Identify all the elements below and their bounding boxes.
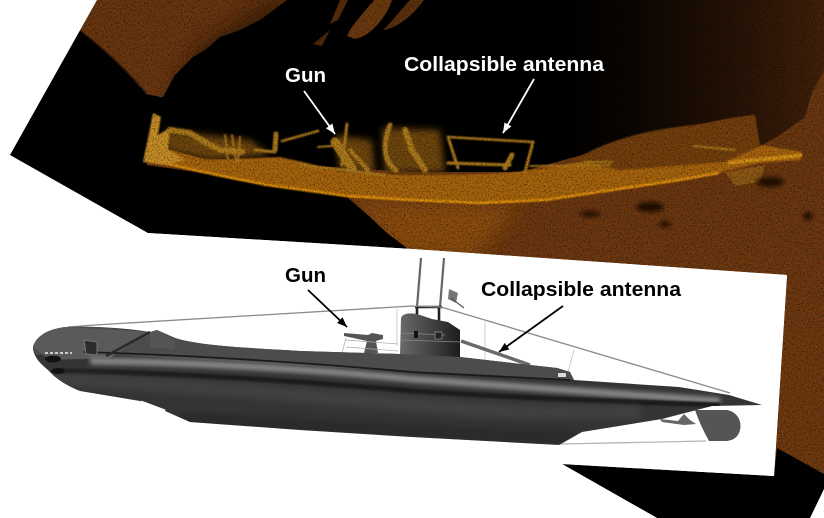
arrow: gun, sonar xyxy=(304,91,335,134)
faint seabed ridge xyxy=(82,32,146,93)
hull keel bright edge xyxy=(148,160,719,203)
label: gun, sonar: Gun xyxy=(285,64,326,87)
bridge rail xyxy=(415,307,442,322)
panel: illustration background xyxy=(148,233,787,518)
bow top xyxy=(33,327,150,360)
hull xyxy=(33,326,762,445)
mottled debris field xyxy=(165,128,445,172)
deck gun xyxy=(342,333,398,353)
stern fin block xyxy=(725,165,765,186)
bow debris xyxy=(143,113,185,165)
label: collapsible antenna, sonar xyxy=(404,53,605,133)
masts xyxy=(417,258,444,307)
dark pits in seabed xyxy=(580,177,813,227)
tube dark line xyxy=(60,371,720,405)
label: collapsible antenna, illustration xyxy=(481,278,682,352)
wreck hull body xyxy=(145,145,802,203)
stern hatch xyxy=(558,373,566,377)
flag xyxy=(448,289,464,308)
lower hull shading xyxy=(40,378,640,413)
collapsible antenna xyxy=(461,341,530,365)
black area left and below wreck xyxy=(0,30,412,252)
bright seabed near hull xyxy=(356,199,516,254)
dimming near shadow edge xyxy=(169,0,286,85)
arrow: gun, illustration xyxy=(308,290,347,327)
label: gun, illustration: Gun xyxy=(285,264,326,287)
label: collapsible antenna, illustration: Collapsible antenna xyxy=(481,278,682,301)
casing dark line xyxy=(84,352,570,380)
label: collapsible antenna, sonar: Collapsible antenna xyxy=(404,53,605,76)
wreck deck debris xyxy=(170,124,735,175)
hull base xyxy=(33,326,762,445)
arrow: antenna, sonar xyxy=(503,79,534,133)
tube band highlight xyxy=(90,361,720,401)
acoustic shadow above wreck xyxy=(150,0,824,172)
upper casing xyxy=(33,326,574,380)
submarine illustration xyxy=(30,258,770,450)
keel shading xyxy=(180,418,575,438)
bow details xyxy=(45,330,175,411)
label: gun, sonar xyxy=(285,64,335,134)
arrow: antenna, illustration xyxy=(499,306,563,352)
right mound xyxy=(575,115,760,170)
stern fin bright edge xyxy=(728,155,802,163)
wire rigging xyxy=(68,306,730,444)
label: gun, illustration xyxy=(285,264,347,327)
propeller xyxy=(660,414,696,425)
conning tower xyxy=(400,313,460,358)
seabed streaks at top xyxy=(313,0,424,46)
rudder xyxy=(695,410,740,441)
black wedge lower right xyxy=(562,448,824,518)
